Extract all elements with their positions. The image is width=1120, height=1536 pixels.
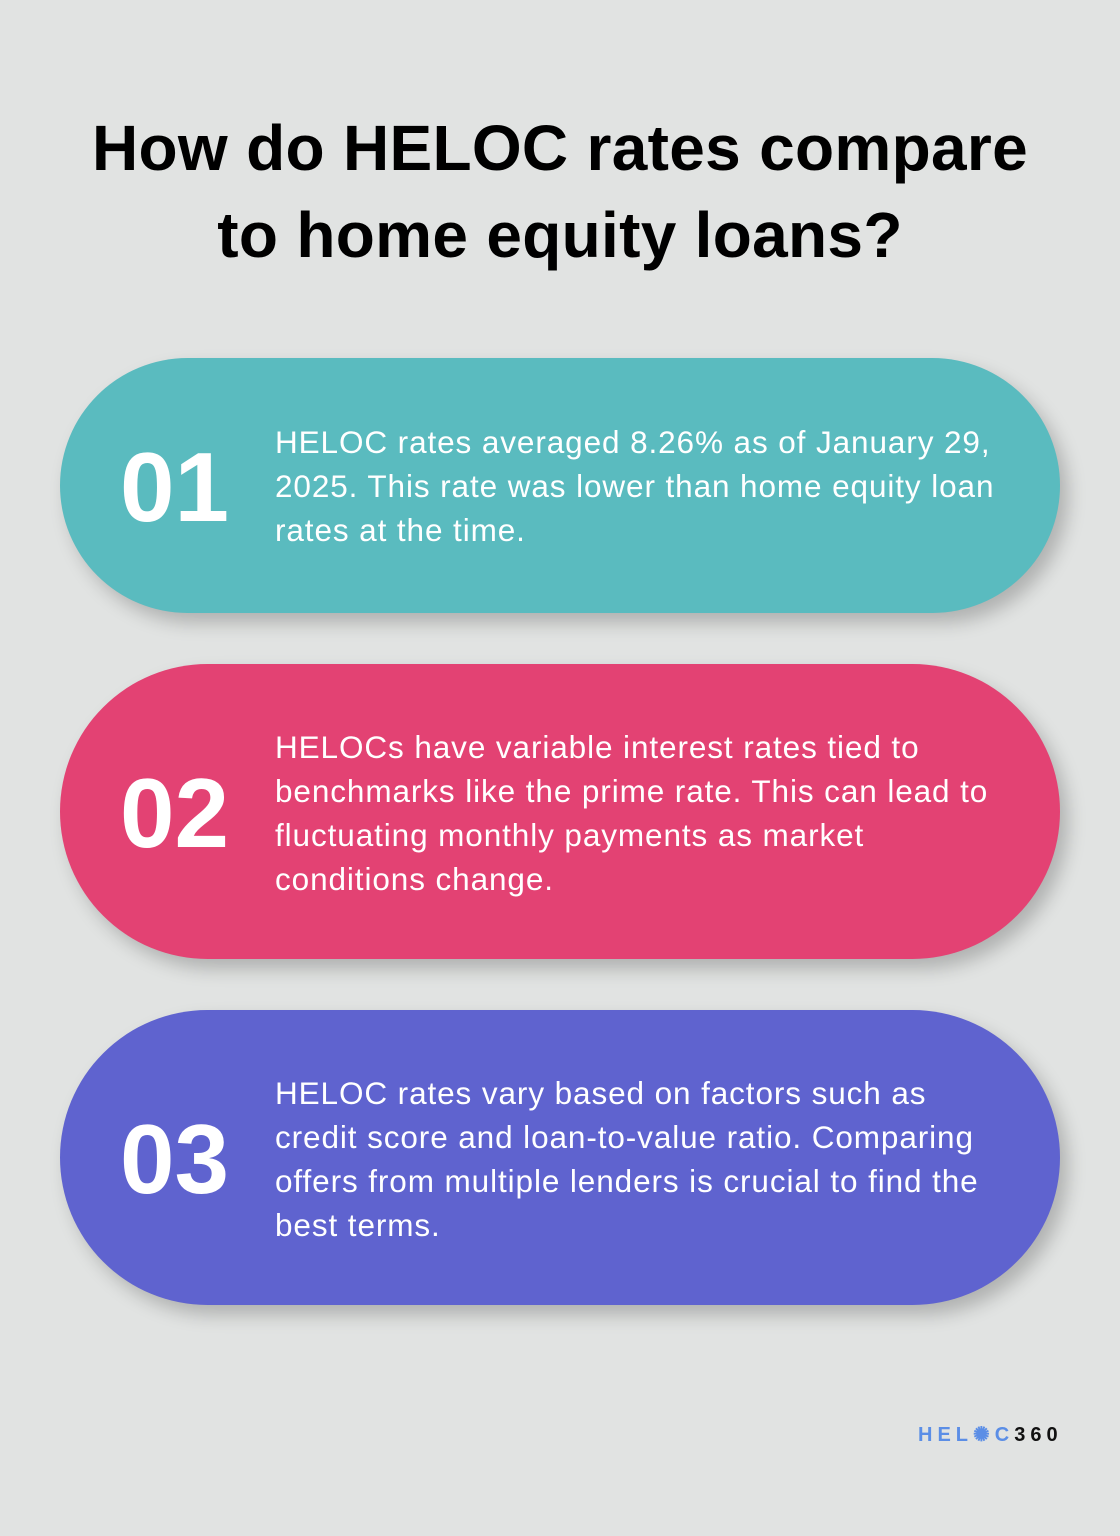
text 03: best terms. xyxy=(275,1207,441,1243)
text 03: credit score and loan-to-value ratio. Comparing xyxy=(275,1119,974,1155)
text 03: HELOC rates vary based on factors such as xyxy=(275,1075,926,1111)
text 02: fluctuating monthly payments as market xyxy=(275,817,864,853)
text 01: HELOC rates averaged 8.26% as of January 29, xyxy=(275,424,990,460)
number 02: 02 xyxy=(120,758,229,868)
panel: 02 xyxy=(60,664,1060,959)
logo: HEL✺C360 xyxy=(918,1424,1063,1446)
text 02: conditions change. xyxy=(275,861,554,897)
title xyxy=(92,112,1028,271)
text 03: offers from multiple lenders is crucial to find the xyxy=(275,1163,979,1199)
text 01: rates at the time. xyxy=(275,512,526,548)
text 01: 2025. This rate was lower than home equity loan xyxy=(275,468,994,504)
panel: 01 xyxy=(60,358,1060,613)
title: to home equity loans? xyxy=(217,199,903,271)
text 02 xyxy=(275,729,988,897)
text 03 xyxy=(275,1075,979,1243)
text 02: benchmarks like the prime rate. This can lead to xyxy=(275,773,988,809)
number 03: 03 xyxy=(120,1104,229,1214)
text 01 xyxy=(275,424,994,548)
text 02: HELOCs have variable interest rates tied to xyxy=(275,729,920,765)
panel: 03 xyxy=(60,1010,1060,1305)
number 01: 01 xyxy=(120,432,229,542)
title: How do HELOC rates compare xyxy=(92,112,1028,184)
